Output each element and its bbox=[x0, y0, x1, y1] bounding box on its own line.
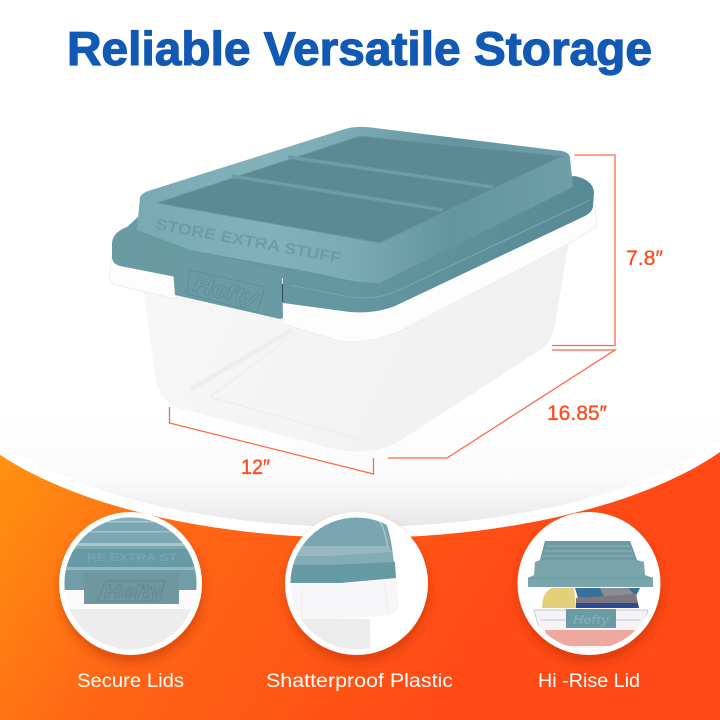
height label: 7.8″ bbox=[626, 247, 664, 270]
dimension: height bbox=[552, 155, 664, 346]
stacked clothes bbox=[542, 588, 576, 608]
dimension: width bbox=[170, 407, 374, 479]
label: hi-rise lid: Hi -Rise Lid bbox=[538, 671, 640, 692]
product: storage bin bbox=[109, 127, 597, 452]
latch tab bbox=[172, 253, 283, 319]
circle frame bbox=[59, 512, 202, 655]
white rim right bbox=[283, 205, 597, 342]
length label: 16.85″ bbox=[547, 402, 608, 425]
lid front and rim bbox=[137, 127, 573, 283]
circle frame bbox=[285, 512, 428, 655]
inner floor of bin bbox=[190, 330, 363, 440]
label: secure lids: Secure Lids bbox=[77, 671, 184, 692]
label: shatterproof plastic: Shatterproof Plastic bbox=[266, 671, 453, 692]
feature: secure lids bbox=[59, 512, 202, 655]
lid ribs bbox=[232, 157, 493, 210]
white rim left bbox=[109, 256, 176, 299]
bin latch bbox=[566, 609, 616, 628]
detail photo: latch bbox=[64, 518, 196, 650]
detail photo: filled bin: Hefty bbox=[573, 612, 610, 627]
latch tab detail bbox=[84, 573, 179, 604]
bin body bbox=[143, 235, 570, 452]
raised lid bbox=[528, 541, 653, 587]
circle frame bbox=[518, 512, 660, 655]
flange highlight bbox=[290, 200, 590, 298]
background: orange band bbox=[0, 430, 720, 720]
embossed lid text: STORE EXTRA STUFF bbox=[154, 216, 342, 267]
detail photo: lid corner bbox=[290, 518, 396, 650]
lid lower flange bbox=[112, 176, 594, 312]
dimension: length bbox=[388, 350, 615, 458]
lid top surface bbox=[157, 136, 563, 243]
background: white curved panel bbox=[0, 0, 720, 538]
feature: hi-rise lid bbox=[518, 512, 660, 655]
title: Reliable Versatile Storage bbox=[67, 22, 652, 75]
latch logo: Hefty bbox=[191, 272, 263, 311]
clear body bbox=[301, 619, 370, 650]
clear rim bbox=[285, 579, 399, 619]
width label: 12″ bbox=[241, 456, 271, 479]
feature: shatterproof plastic bbox=[285, 512, 428, 655]
clear bin with pink garment bbox=[534, 610, 648, 648]
detail photo: latch: Hefty bbox=[104, 582, 165, 603]
latch logo bbox=[187, 270, 265, 312]
detail photo: latch: RE EXTRA ST bbox=[87, 552, 177, 564]
detail photo: filled bin bbox=[528, 541, 653, 648]
latch gap bbox=[282, 284, 284, 302]
